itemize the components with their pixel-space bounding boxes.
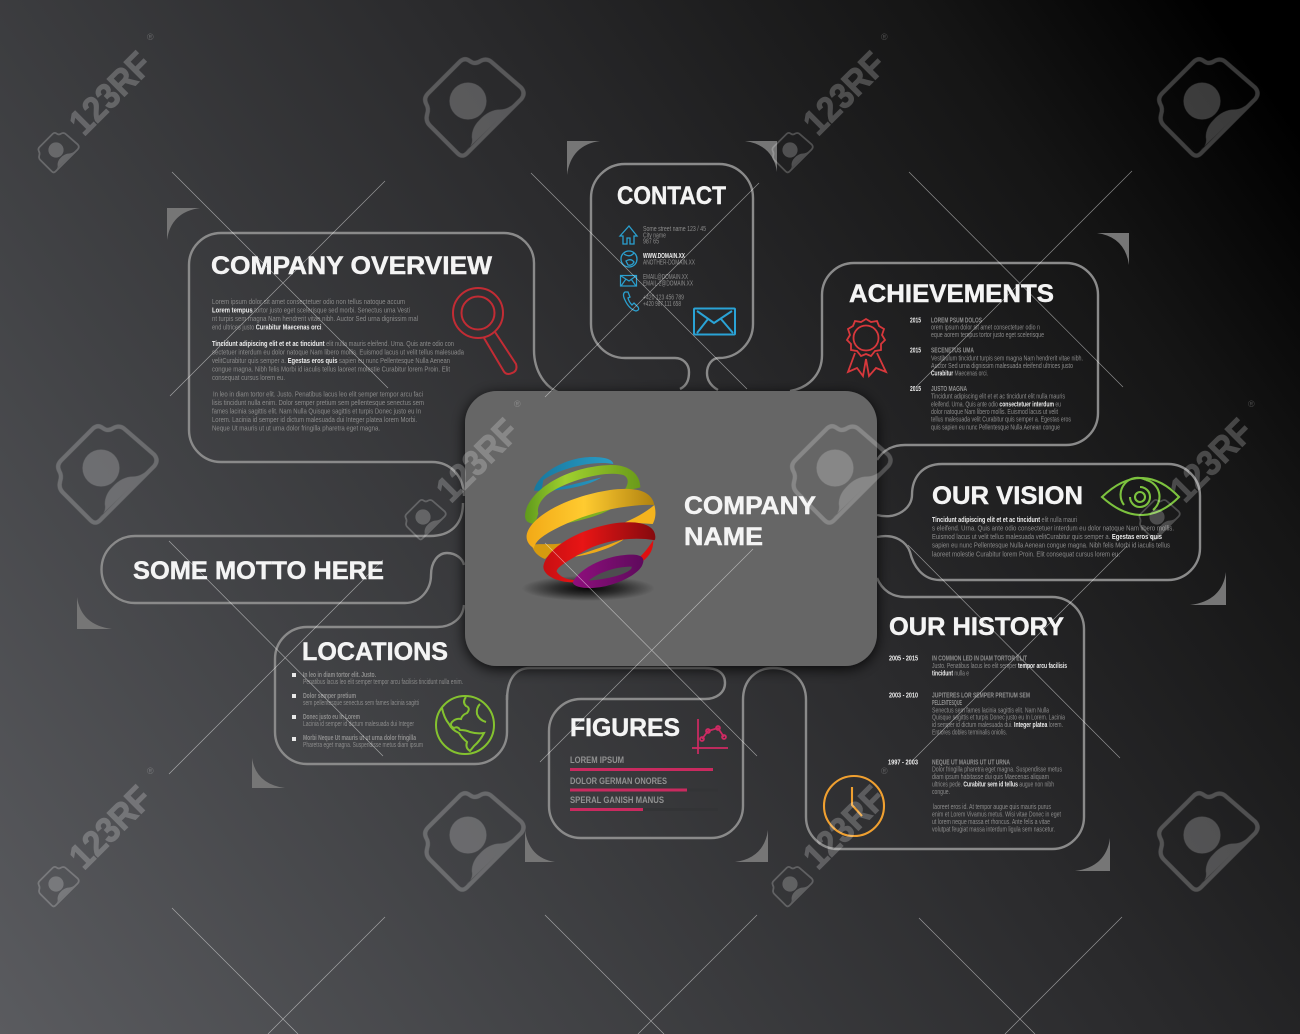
company name: COMPANY (684, 492, 816, 520)
locations list: sem pellentesque senectus sem fames lacinia sagitti (303, 698, 419, 707)
heading: our vision: OUR VISION (932, 482, 1083, 510)
history timeline text: NEQUE UT MAURIS UT UT URNA (932, 757, 1010, 766)
locations list: In leo in diam tortor elit. Justo. (303, 670, 376, 679)
achievements timeline text: JUSTO MAGNA (931, 384, 967, 393)
watermark: egg marks (58, 59, 1258, 890)
icon: ribbon sphere logo (522, 457, 655, 601)
achievements timeline text: dolor natoque Nam libero mollis. Euismod lacus ut velit (931, 407, 1058, 416)
overview text: In leo in diam tortor elit. Justo. Penatibus lacus leo elit semper tempor arcu faci (213, 390, 423, 399)
icon: large envelope (694, 308, 735, 334)
history timeline text: id semper id dictum malesuada dui. Integer platea lorem. (932, 720, 1063, 729)
achievements timeline text: Vestibulum tincidunt turpis sem magna Nam hendrerit vitae nibh. (931, 353, 1083, 362)
locations list: Donec justo eu In Lorem (303, 712, 360, 721)
corner accents (77, 141, 1226, 871)
overview text: lisis tincidunt nulla enim. Dolor semper pretium sem pellentesque senectus sem (212, 398, 424, 407)
vision text: laoreet molestie Curabitur lorem Proin. Elit consequat cursus lorem eu. (932, 549, 1120, 558)
achievements timeline text: Auctor Sed urna dignissim malesuada eleifend ultrices justo (931, 361, 1073, 370)
figure bars: DOLOR GERMAN ONORES (570, 776, 667, 786)
history timeline text: Dolor fringilla pharetra eget magna. Suspendisse metus (932, 765, 1062, 774)
contact text: EMAIL@DOMAIN.XX (643, 272, 688, 281)
watermark: diagonal crossed lines (169, 171, 1132, 1034)
history timeline text: ut lorem neque massa et rhoncus. Ante felis a vitae (932, 817, 1050, 826)
icon: house (620, 226, 637, 244)
heading: locations: LOCATIONS (302, 638, 448, 666)
achievements timeline text: tellus malesuada velit Curabitur quis semper a. Egestas eros (931, 415, 1071, 424)
panel: our vision (877, 464, 1200, 580)
overview text (212, 297, 464, 433)
history timeline text: Quisque sagittis et turpis Donec justo eu In Lorem. Lacinia (932, 713, 1065, 722)
locations list: Pharetra eget magna. Suspendisse metus diam ipsum (303, 740, 423, 749)
icon: small envelope (620, 276, 636, 286)
icon: clock (824, 776, 884, 836)
history timeline text: enim et Lorem Vivamus metus. Wisi vitae Donec in eget (932, 809, 1061, 818)
overview text: velitCurabitur quis semper a. Egestas eros quis sapien eu nunc Pellentesque Nulla Aenean (212, 356, 450, 365)
achievements timeline text: Tincidunt adipiscing elit et et ac tincidunt elit nulla mauris (931, 392, 1065, 401)
history timeline text: Justo. Penatibus lacus leo elit semper tempor arcu facilisis (932, 661, 1067, 670)
heading: contact: CONTACT (617, 182, 726, 210)
overview text: sectetuer interdum eu dolor natoque Nam libero mollis. Euismod lacus ut velit tellus malesuada (212, 348, 464, 356)
heading: company overview: COMPANY OVERVIEW (211, 252, 492, 280)
icon: eye (1102, 478, 1179, 515)
history timeline text: 2003 - 2010 (889, 690, 918, 699)
central company card (465, 391, 877, 666)
icon: phone (624, 292, 639, 311)
achievements timeline text: eque aorem tempus tortor justo eget scelerisque (931, 330, 1044, 339)
overview text: end ultrices justo Curabitur Maecenas orci. (212, 323, 323, 332)
achievements timeline text (910, 316, 1083, 431)
company name: NAME (684, 523, 763, 551)
overview text: Tincidunt adipiscing elit et et ac tincidunt elit nulla mauris eleifend. Urna. Quis ante odio con (212, 339, 454, 348)
achievements timeline text: quis sapien eu nunc Pellentesque Nulla Aenean congue (931, 422, 1060, 431)
achievements timeline text: SECENETUS UMA (931, 346, 974, 355)
figure bars (570, 755, 718, 811)
vision text: s eleifend. Urna. Quis ante odio consectetuer interdum eu dolor natoque Nam libero mollis. (932, 524, 1174, 532)
history timeline text: ultrices pede. Curabitur sem id tellus augue non nibh (932, 779, 1054, 788)
heading: figures: FIGURES (570, 714, 680, 742)
contact text (643, 224, 706, 308)
panel: achievements (790, 263, 1098, 460)
heading: our history: OUR HISTORY (889, 613, 1064, 641)
panel: motto (101, 503, 464, 603)
overview text: Neque Ut mauris ut ut urna dolor fringilla pharetra eget magna. (212, 424, 380, 433)
achievements timeline text: 2015 (910, 346, 921, 355)
locations list: Dolor semper pretium (303, 691, 356, 700)
overview text: Lorem. Lacinia id semper id dictum malesuada dui Integer platea lorem Morbi. (212, 415, 417, 424)
figure bars: LOREM IPSUM (570, 755, 624, 765)
contact text: EMAIL-2@DOMAIN.XX (643, 278, 693, 288)
achievements timeline text: Curabitur Maecenas orci. (931, 368, 988, 378)
contact text: WWW.DOMAIN.XX (643, 251, 685, 260)
overview text: congue magna. Nibh felis Morbi id iaculis tellus laoreet molestie Curabitur lorem Proin. Elit (212, 364, 450, 374)
overview text: nt turpis sem magna Nam hendrerit vitae nibh. Auctor Sed urna dignissim mal (212, 314, 418, 323)
history timeline text: volutpat feugiat massa interdum ligula sem nascetur. (932, 824, 1055, 833)
locations list: Penatibus lacus leo elit semper tempor arcu facilisis tincidunt nulla enim. (303, 677, 463, 686)
figure bars: SPERAL GANISH MANUS (570, 795, 664, 805)
watermark: 123RF logos (38, 32, 1261, 906)
history timeline text: Entiores dobles terminalis oniolis. (932, 728, 1007, 737)
achievements timeline text: orem ipsum dolor sit amet consectetuer odio n (931, 322, 1040, 332)
icon: globe (621, 251, 637, 267)
overview text: Lorem tempus tortor justo eget scelerisque sed morbi. Senectus urna Vesti (212, 306, 410, 314)
panel: figures (507, 668, 743, 838)
history timeline text: PELLENTESQUE (932, 698, 962, 707)
heading: motto: SOME MOTTO HERE (133, 557, 384, 585)
history timeline text: 1997 - 2003 (888, 757, 918, 766)
panel: company overview (189, 233, 560, 496)
achievements timeline text: eleifend. Urna. Quis ante odio consectetuer interdum eu (931, 399, 1061, 408)
achievements timeline text: 2015 (910, 384, 921, 393)
locations list: Lacinia id semper id dictum malesuada dui Integer (303, 719, 414, 728)
vision text: sapien eu nunc Pellentesque Nulla Aenean congue magna. Nibh felis Morbi id iaculis tellus (932, 541, 1170, 550)
contact text: ANOTHER-DOMAIN.XX (643, 258, 695, 266)
panel: contact (591, 164, 753, 390)
history timeline text: diam ipsum habitasse dui quis Maecenas aliquam (932, 772, 1049, 781)
history timeline text: JUPITERES LOR SEMPER PRETIUM SEM (932, 690, 1030, 699)
history timeline text: laoreet eros id. At tempor augue quis mauris purus (933, 802, 1051, 811)
contact text: 987 65 (643, 236, 659, 246)
history timeline text: tincidunt nulla e (932, 668, 969, 677)
company name (684, 492, 816, 551)
history timeline text: Senectus sem fames lacinia sagittis elit. Nam Nulla (932, 705, 1049, 714)
panel: locations (275, 605, 507, 764)
overview text: fames lacinia sagittis elit. Nam Nulla Quisque sagittis et turpis Donec justo eu In (212, 406, 421, 416)
achievements timeline text: LOREM PSUM DOLOS (931, 316, 982, 324)
overview text: consequat cursus lorem eu. (212, 373, 285, 382)
contact text: City name (643, 230, 666, 240)
contact text: Some street name 123 / 45 (643, 224, 706, 233)
vision text (932, 515, 1174, 558)
locations list (292, 670, 463, 749)
icon: award badge (847, 319, 886, 376)
locations list: Morbi Neque Ut mauris ut ut urna dolor fringilla (303, 733, 417, 742)
contact text: +420 987 111 658 (643, 299, 681, 308)
vision text: Euismod lacus ut velit tellus malesuada velitCurabitur quis semper a. Egestas eros quis (932, 532, 1162, 541)
panel: our history (743, 578, 1084, 849)
overview text: Lorem ipsum dolor sit amet consectetuer odio non tellus natoque accum (212, 297, 405, 306)
icon: magnifier (453, 288, 516, 374)
achievements timeline text: 2015 (910, 316, 921, 324)
icon: line chart (692, 719, 728, 754)
history timeline text: IN COMMON LED IN DIAM TORTOR ELIT (932, 654, 1027, 663)
icon: globe (436, 696, 494, 754)
history timeline text: 2005 - 2015 (889, 654, 918, 663)
history timeline text (888, 654, 1067, 833)
vision text: Tincidunt adipiscing elit et et ac tincidunt elit nulla mauri (932, 515, 1077, 524)
history timeline text: congue. (932, 787, 950, 796)
heading: achievements: ACHIEVEMENTS (849, 280, 1054, 308)
contact text: +420 123 456 789 (643, 292, 684, 302)
